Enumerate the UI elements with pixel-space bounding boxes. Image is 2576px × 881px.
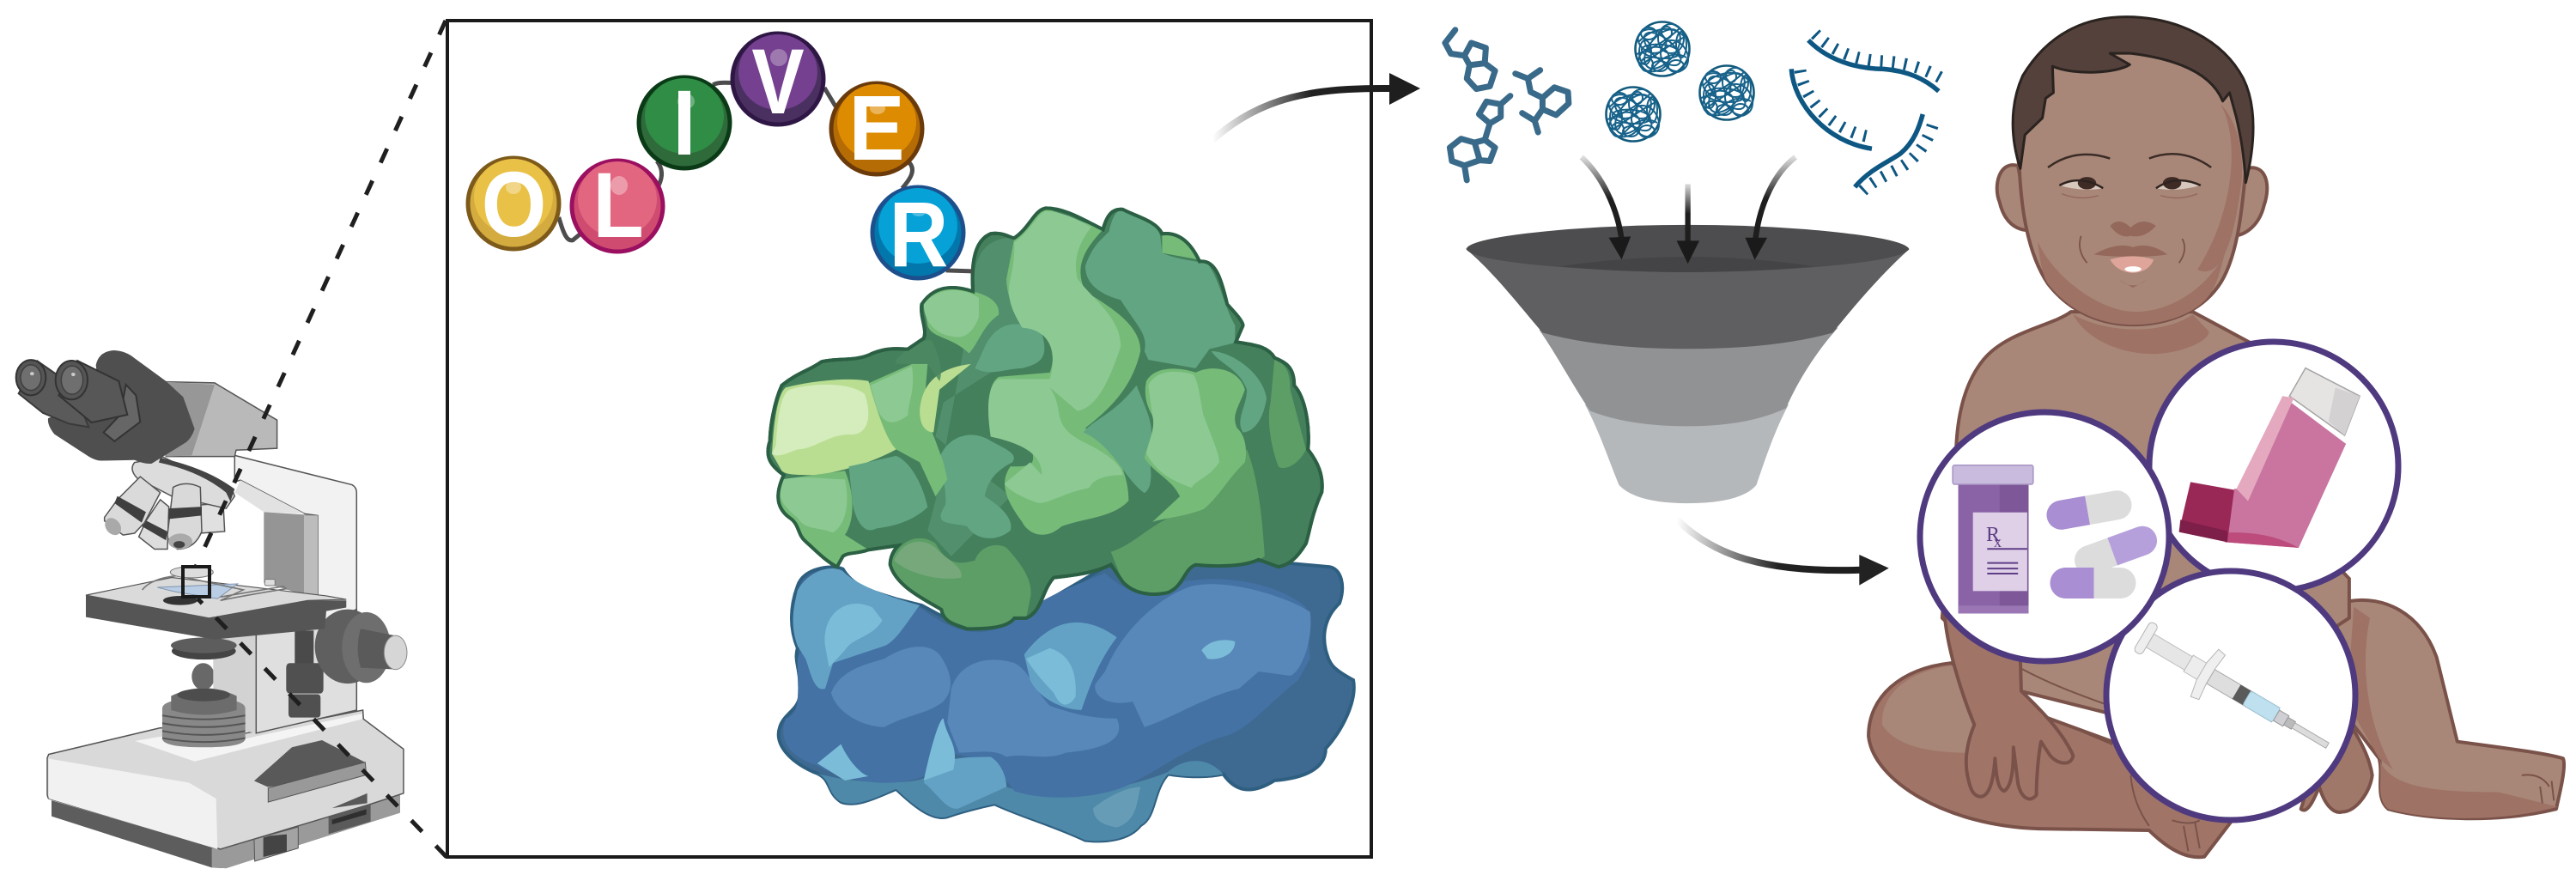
microscope condenser xyxy=(171,638,237,659)
baby right leg xyxy=(2315,600,2564,818)
bead L: L xyxy=(592,153,644,257)
bead E: E xyxy=(849,76,904,179)
protein scribble balls xyxy=(1605,22,1758,142)
microscope arm xyxy=(234,455,356,719)
OLIVER beads xyxy=(468,30,963,286)
inset circle: inhaler xyxy=(2149,342,2398,591)
bead I xyxy=(639,70,730,174)
icon: capsule 3 xyxy=(2050,568,2136,598)
belly crease xyxy=(2021,669,2112,744)
arrow: frame to candidates xyxy=(1212,73,1420,140)
baby eyes xyxy=(2059,177,2201,198)
bead R: R xyxy=(890,182,948,286)
icon: capsule 1 xyxy=(2044,489,2134,532)
baby face xyxy=(2017,22,2247,325)
baby foot toes xyxy=(2130,775,2200,851)
bead E xyxy=(831,76,922,179)
inset circle: pills xyxy=(1920,412,2169,661)
baby eyebrows xyxy=(2048,154,2211,167)
microscope objectives xyxy=(102,457,234,550)
bead R xyxy=(872,182,963,286)
microscope head xyxy=(166,382,277,457)
funnel xyxy=(1466,225,1909,503)
small molecules xyxy=(1445,30,1569,180)
microscope column and lamp xyxy=(162,610,356,747)
funnel top tier xyxy=(1466,249,1909,349)
RNA strands xyxy=(1791,33,1944,191)
bead I: I xyxy=(672,70,696,174)
protein: green domain xyxy=(768,208,1322,629)
bead O: O xyxy=(482,152,546,256)
icon: pill bottle xyxy=(1953,465,2033,613)
icon: pill bottle: x xyxy=(1994,533,2002,550)
microscope xyxy=(16,350,407,868)
microscope focus knobs xyxy=(286,610,407,718)
inset circle: syringe xyxy=(2106,571,2355,820)
microscope base xyxy=(47,710,404,868)
panel: zoom frame xyxy=(447,21,1371,857)
baby xyxy=(1868,17,2564,857)
funnel middle tier xyxy=(1539,328,1838,426)
icon: capsule 2 xyxy=(2070,522,2161,579)
baby nose xyxy=(2110,222,2156,236)
small square on slide xyxy=(183,567,210,597)
baby left leg xyxy=(1868,663,2237,857)
icon: inhaler xyxy=(2179,368,2360,548)
icon: syringe xyxy=(2128,612,2342,769)
bead L xyxy=(572,153,663,257)
baby hair xyxy=(2013,17,2253,183)
dashed zoom lines xyxy=(196,21,447,857)
baby mouth xyxy=(2080,236,2184,288)
arrows into funnel xyxy=(1582,157,1795,264)
microscope stage xyxy=(86,567,346,640)
baby left arm xyxy=(1944,612,2073,799)
bead V xyxy=(732,30,823,134)
icon: pill bottle: R xyxy=(1986,524,2000,546)
peptide linkers xyxy=(559,82,972,271)
funnel bottom tier xyxy=(1585,404,1789,503)
arrow: funnel to baby xyxy=(1677,519,1889,586)
bead V: V xyxy=(751,30,805,134)
baby torso xyxy=(1942,312,2349,731)
protein: blue domain xyxy=(779,561,1354,841)
baby hand behind xyxy=(2301,731,2372,812)
funnel rim xyxy=(1466,225,1909,272)
baby ears xyxy=(1997,165,2267,236)
microscope eyepieces xyxy=(16,350,195,464)
